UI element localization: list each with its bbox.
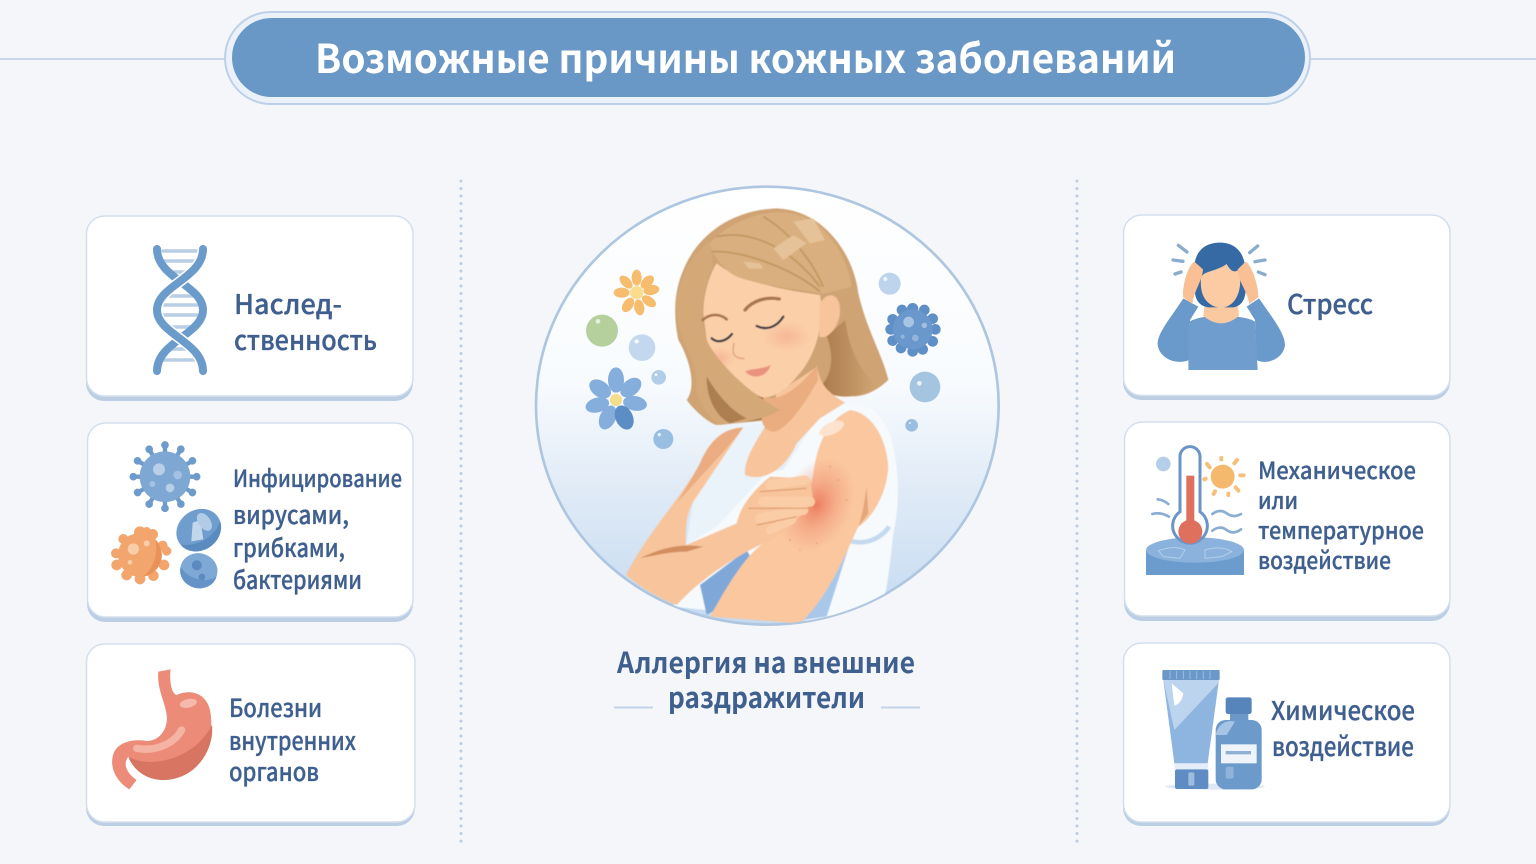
scratching arm and hand	[626, 427, 813, 605]
panel: stress	[1123, 215, 1450, 400]
tank top	[673, 428, 898, 621]
label: infections	[233, 459, 402, 597]
icon: stressed person	[1158, 243, 1285, 370]
central illustration: woman with allergic rash	[536, 187, 999, 625]
label: infections: бактериями	[233, 561, 362, 597]
icon: yellow flower	[614, 270, 660, 316]
title text: Возможные причины кожных заболеваний	[315, 27, 1176, 85]
label: infections: вирусами,	[233, 496, 349, 532]
label: infections: грибками,	[233, 529, 345, 565]
label: mechanical or thermal	[1258, 451, 1424, 576]
center caption	[614, 640, 920, 717]
label: heredity	[234, 283, 377, 358]
panel: chemical	[1123, 643, 1450, 826]
panel: heredity	[86, 216, 413, 401]
icon: blue cell	[176, 549, 221, 593]
label: chemical: воздействие	[1272, 727, 1414, 764]
icon: microbes	[111, 443, 229, 593]
center caption: раздражители	[668, 675, 865, 717]
center caption: Аллергия на внешние	[616, 640, 915, 682]
panel: internal organs	[86, 644, 415, 826]
icon: blue virus	[132, 443, 198, 510]
label: infections: Инфицирование	[233, 459, 402, 494]
icon: DNA helix	[157, 249, 203, 371]
upper arm with rash	[710, 410, 888, 623]
icon: virus particle	[885, 303, 941, 357]
label: internal organs: органов	[229, 753, 319, 789]
label: mechanical or thermal: или	[1258, 481, 1298, 516]
panel: mechanical or thermal	[1124, 422, 1450, 621]
label: stress: Стресс	[1287, 283, 1373, 322]
icon: thermometer with sun	[1146, 447, 1244, 575]
icon: blue flower	[584, 367, 648, 433]
label: chemical: Химическое	[1271, 691, 1415, 728]
label: chemical	[1271, 691, 1415, 764]
icon: stomach	[112, 669, 212, 789]
label: internal organs: Болезни	[229, 689, 322, 725]
front hair	[711, 348, 780, 426]
label: heredity: Наслед-	[234, 283, 342, 322]
icon: orange bacterium	[111, 526, 171, 584]
facial features	[757, 317, 783, 328]
label: heredity: ственность	[234, 319, 377, 358]
label: internal organs	[229, 689, 356, 789]
icon: cream tube and bottle	[1162, 670, 1265, 790]
panel: infections	[87, 423, 413, 622]
icon: allergen bubbles	[586, 273, 940, 449]
label: mechanical or thermal: температурное	[1258, 511, 1424, 546]
label: mechanical or thermal: Механическое	[1258, 451, 1416, 486]
neck and chest	[745, 367, 845, 477]
label: mechanical or thermal: воздействие	[1258, 541, 1391, 576]
label: internal organs: внутренних	[229, 722, 356, 758]
illustration: woman	[626, 208, 898, 623]
icon: blue spore	[168, 500, 229, 560]
face	[703, 263, 821, 397]
title banner	[225, 12, 1310, 104]
